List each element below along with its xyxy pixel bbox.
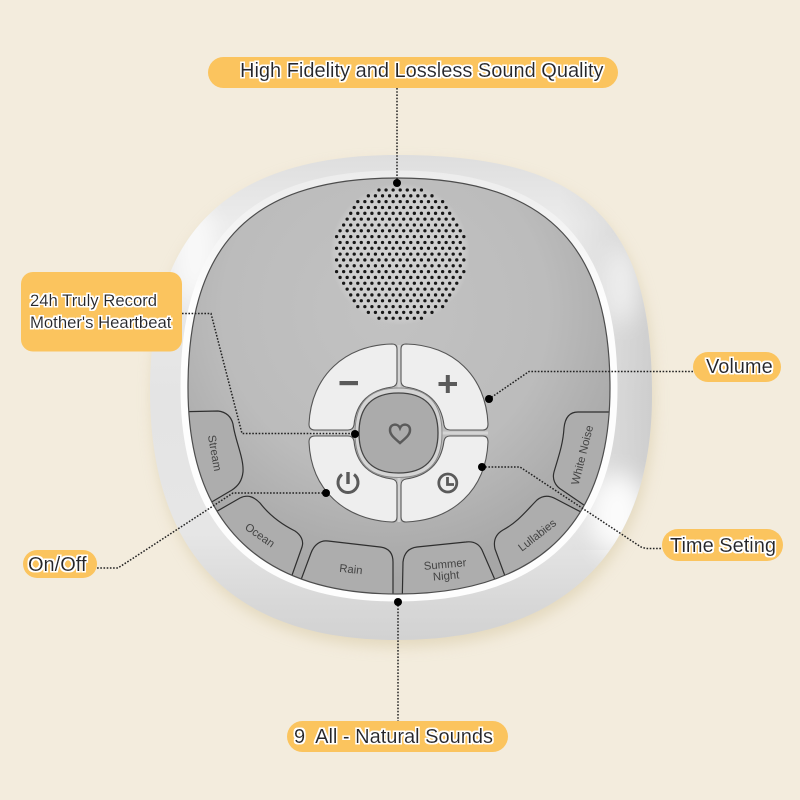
sound tab: White Noise (552, 411, 609, 506)
sound tab: Lullabies: Lullabies (516, 517, 559, 554)
sound tab: White Noise: White Noise (570, 424, 596, 486)
sound tab: Summer Night (402, 541, 495, 594)
label: time setting: Time Seting (670, 535, 776, 557)
sound tab: Summer Night: Night (432, 569, 461, 584)
label: sound quality (208, 57, 618, 88)
leader: heartbeat (182, 314, 359, 438)
sound tab: Summer Night: Summer (423, 557, 467, 573)
label: on/off (23, 550, 97, 578)
leader: natural sounds (394, 598, 402, 721)
panel outline (188, 178, 610, 594)
leader: volume (485, 372, 693, 403)
sound tab: Stream (189, 410, 244, 502)
label: volume (693, 352, 781, 382)
label: natural sounds: 9 All - Natural Sounds (294, 726, 493, 748)
button: heartbeat (355, 388, 442, 478)
label: heartbeat card: Mother's Heartbeat (30, 313, 172, 332)
label: volume: Volume (706, 356, 773, 378)
sound tab: Rain: Rain (339, 563, 363, 577)
label: heartbeat card (21, 272, 182, 352)
label: sound quality: High Fidelity and Lossless Sound Quality (240, 60, 604, 82)
speaker grille (330, 183, 470, 325)
sound tab: Ocean (217, 496, 304, 575)
button: volume down (309, 344, 397, 430)
control cluster (309, 344, 488, 522)
icon: clock (439, 474, 457, 492)
icon: heart (390, 425, 410, 443)
leader: time setting (478, 463, 662, 548)
label: heartbeat card: 24h Truly Record (30, 291, 157, 310)
sound tab: Rain (301, 540, 394, 594)
white rim (188, 178, 610, 594)
button: power (309, 436, 397, 522)
panel: grey face (188, 178, 610, 594)
icon: power (338, 472, 358, 492)
leader: sound quality (393, 88, 401, 187)
sound tab: Lullabies (494, 496, 580, 575)
button: volume up (401, 344, 488, 430)
leader: on/off (97, 489, 330, 568)
label: time setting (662, 529, 783, 561)
label: natural sounds (287, 721, 508, 752)
sound tab: Stream: Stream (205, 434, 223, 472)
label: on/off: On/Off (28, 554, 87, 576)
device body (150, 150, 655, 647)
button: timer (401, 436, 488, 522)
sound tab: Ocean: Ocean (242, 521, 277, 550)
